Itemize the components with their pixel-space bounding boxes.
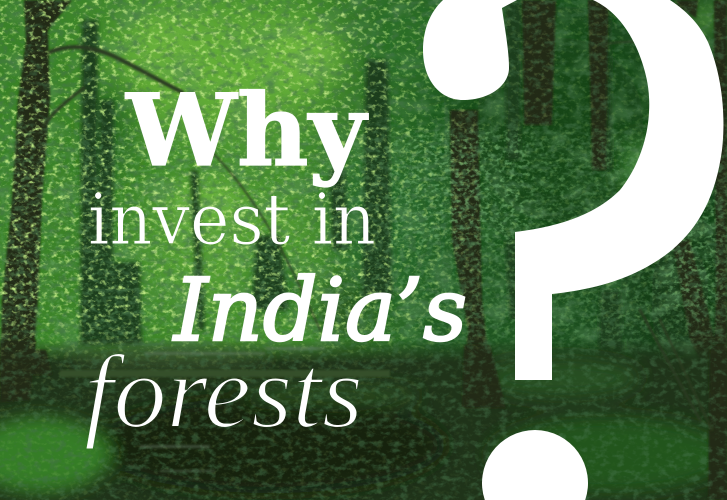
distant trunks bbox=[80, 0, 624, 365]
title line: Why: Why bbox=[125, 73, 368, 189]
swamp water reflections bbox=[140, 347, 325, 472]
question mark curve and stem bbox=[515, 0, 723, 380]
title line: India's: India’s bbox=[172, 261, 467, 361]
leaves occluding the trunks bbox=[0, 118, 727, 350]
title line: invest in: invest in bbox=[88, 178, 376, 261]
trunk bases on the forest floor bbox=[0, 340, 727, 500]
canopy light and shade bbox=[10, 0, 725, 380]
question mark bbox=[423, 0, 723, 500]
branches bbox=[44, 42, 712, 430]
fallen log bbox=[60, 370, 390, 377]
canopy patches bbox=[88, 2, 718, 340]
forest floor and swamp bbox=[0, 340, 727, 500]
title bbox=[84, 73, 467, 450]
question mark hook bbox=[423, 0, 517, 100]
title line: forests: forests bbox=[84, 333, 363, 450]
question mark dot bbox=[482, 430, 588, 500]
